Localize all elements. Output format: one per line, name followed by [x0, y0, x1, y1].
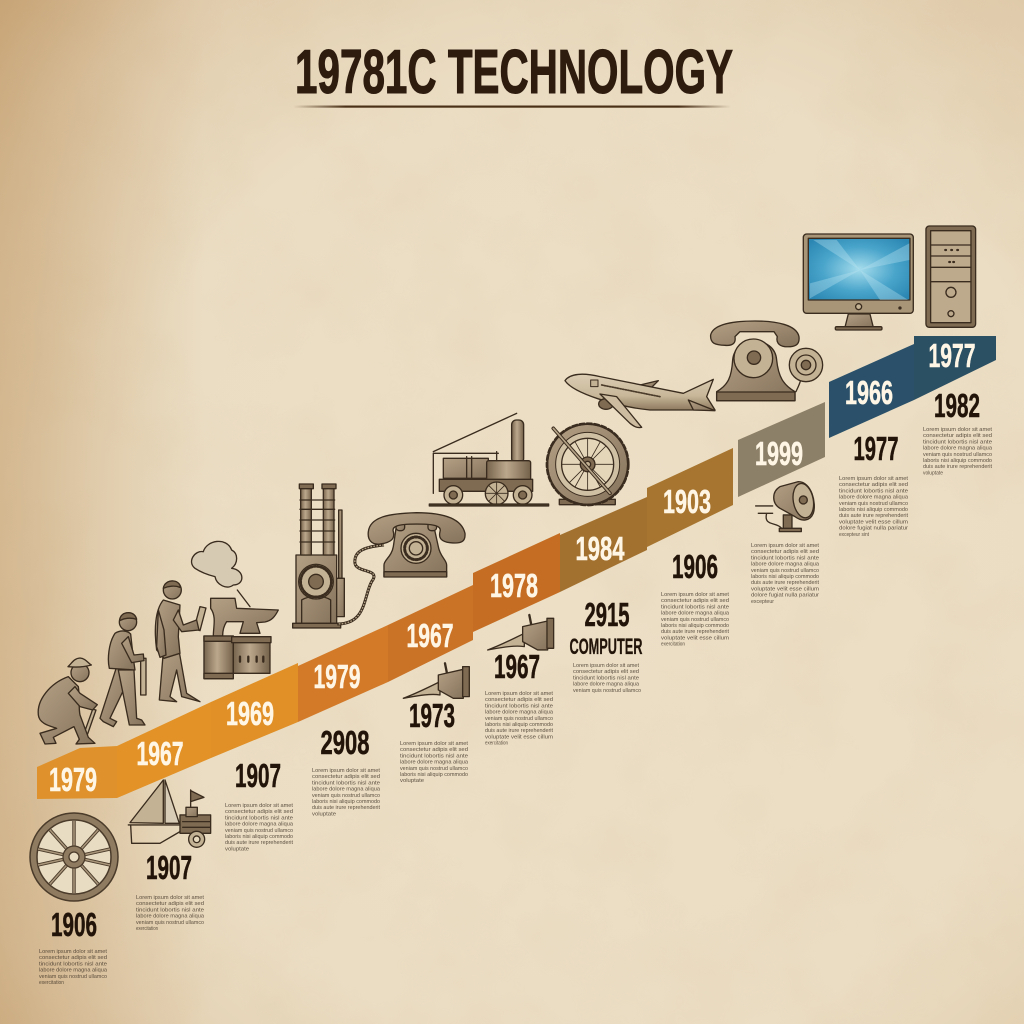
- icon: chimney furnace: [293, 484, 344, 628]
- segment 1977: [914, 336, 996, 400]
- icon: antique telephone: [711, 321, 823, 401]
- segment 1966: [829, 344, 914, 438]
- text block under 1977: voluptate velit esse cillum: [839, 519, 909, 525]
- text block under 2908: Lorem ipsum dolor sit amet: [312, 768, 381, 774]
- year 1973: 1973: [409, 697, 455, 734]
- text block under right 1906: duis aute irure reprehenderit: [661, 629, 730, 635]
- segment 1999: 1999: [755, 435, 803, 472]
- text block under 2908: labore dolore magna aliqua: [312, 787, 380, 793]
- text block under 1907: veniam quis nostrud ullamco: [136, 920, 204, 926]
- icon: spoked wheel: [30, 813, 118, 901]
- text block under 1982: voluptate: [923, 470, 943, 476]
- text block under 2908: consectetur adipis elit sed: [312, 774, 380, 780]
- text block under 1982: tincidunt lobortis nisl ante: [923, 439, 992, 445]
- text block under 1967: laboris nisi aliquip commodo: [485, 722, 553, 728]
- title: 19781C TECHNOLOGY: [295, 38, 733, 107]
- segment 1979: [37, 746, 117, 799]
- icon: sailboat vehicle: [128, 780, 211, 847]
- text block under 1982: [923, 427, 993, 476]
- text block under second 1907: veniam quis nostrud ullamco: [225, 828, 293, 834]
- text block under 1973: labore dolore magna aliqua: [400, 760, 468, 766]
- timeline ribbon: [37, 336, 996, 799]
- icon: crouching worker: [38, 658, 97, 744]
- computer label: COMPUTER: [570, 634, 643, 659]
- segment 1978: [473, 533, 560, 632]
- text block under 1977: veniam quis nostrud ullamco: [839, 501, 908, 507]
- text block under loudspeaker: labore dolore magna aliqua: [751, 562, 819, 568]
- text block under 1906: labore dolore magna aliqua: [39, 968, 107, 974]
- text block under loudspeaker: laboris nisi aliquip commodo: [751, 574, 819, 580]
- text block under loudspeaker: veniam quis nostrud ullamco: [751, 568, 819, 574]
- segment 1969: 1969: [226, 695, 274, 732]
- text block under right 1906: laboris nisi aliquip commodo: [661, 623, 729, 629]
- icon: plow left: [403, 663, 469, 698]
- text block under 1982: labore dolore magna aliqua: [923, 446, 992, 452]
- text block under 1973: veniam quis nostrud ullamco: [400, 766, 468, 772]
- segment 1967: 1967: [136, 735, 184, 772]
- text block under second 1907: consectetur adipis elit sed: [225, 809, 293, 815]
- segment 1967 second: [388, 585, 473, 682]
- icon: rotary telephone: [368, 513, 465, 577]
- text block under loudspeaker: tincidunt lobortis nisl ante: [751, 555, 819, 561]
- text block under 1967: Lorem ipsum dolor sit amet: [485, 691, 554, 697]
- text block under 1967: veniam quis nostrud ullamco: [485, 716, 553, 722]
- year 1907: 1907: [146, 849, 192, 886]
- icon: coiled telephone cord: [337, 545, 384, 624]
- icon group: furnace, telephone, locomotive, tire, plows: [293, 413, 628, 698]
- text block under second 1907: Lorem ipsum dolor sit amet: [225, 803, 294, 809]
- text block under 1982: Lorem ipsum dolor sit amet: [923, 427, 993, 433]
- text block under right 1906: Lorem ipsum dolor sit amet: [661, 592, 730, 598]
- segment 1967 second: 1967: [406, 617, 454, 654]
- text block under computer: [573, 663, 641, 694]
- text block under 1982: duis aute irure reprehenderit: [923, 464, 993, 470]
- segment 1967: [117, 702, 211, 798]
- text block under loudspeaker: excepteur: [751, 599, 774, 605]
- text block under 1973: laboris nisi aliquip commodo: [400, 772, 468, 778]
- segment 1978: 1978: [490, 567, 538, 604]
- year 1967: 1967: [494, 648, 540, 685]
- icon: computer tower: [926, 226, 976, 327]
- text block under second 1907: voluptate: [225, 846, 249, 852]
- text block under computer: veniam quis nostrud ullamco: [573, 688, 641, 694]
- text block under 1977: duis aute irure reprehenderit: [839, 513, 909, 519]
- text block under 1982: consectetur adipis elit sed: [923, 433, 992, 439]
- text block under 1907: consectetur adipis elit sed: [136, 901, 204, 907]
- text block under 1907: Lorem ipsum dolor sit amet: [136, 895, 205, 901]
- text block under computer: labore dolore magna aliqua: [573, 682, 639, 688]
- year 1906 left: 1906: [51, 906, 97, 943]
- text block under second 1907: duis aute irure reprehenderit: [225, 840, 294, 846]
- text block under 1967: voluptate velit esse cillum: [485, 734, 554, 740]
- text block under 1906: [39, 949, 108, 986]
- text block under 2908: tincidunt lobortis nisl ante: [312, 780, 380, 786]
- text block under 1906: tincidunt lobortis nisl ante: [39, 961, 107, 967]
- text block under 2908: [312, 768, 381, 817]
- icon: walking worker: [100, 613, 146, 727]
- text block under right 1906: exercitation: [661, 642, 685, 648]
- segment 1903: 1903: [663, 483, 711, 520]
- text block under 1907: labore dolore magna aliqua: [136, 914, 204, 920]
- segment 1979 second: 1979: [314, 658, 360, 695]
- text block under 1982: veniam quis nostrud ullamco: [923, 452, 992, 458]
- icons: workers, smoke and anvil: [38, 541, 278, 744]
- text block under 1907: tincidunt lobortis nisl ante: [136, 907, 204, 913]
- icon: large tire wheel: [547, 424, 628, 505]
- text block under 1977: consectetur adipis elit sed: [839, 482, 908, 488]
- icon: anvil on cylinders: [204, 598, 278, 679]
- segment 1966: 1966: [845, 374, 893, 411]
- icon: loudspeaker: [756, 482, 816, 532]
- icon: plow right: [488, 615, 554, 650]
- text block under computer: Lorem ipsum dolor sit amet: [573, 663, 640, 669]
- icon: locomotive: [429, 413, 549, 506]
- text block under 1977: Lorem ipsum dolor sit amet: [839, 476, 909, 482]
- text block under 1977: laboris nisi aliquip commodo: [839, 507, 908, 513]
- text block under 1967: [485, 691, 554, 747]
- year 2908: 2908: [320, 724, 370, 761]
- text block under loudspeaker: dolore fugiat nulla pariatur: [751, 593, 819, 599]
- text block under 1977: tincidunt lobortis nisl ante: [839, 488, 908, 494]
- text block under second 1907: labore dolore magna aliqua: [225, 822, 293, 828]
- black year labels: [51, 387, 980, 943]
- text block under 1906: exercitation: [39, 980, 64, 986]
- text block under 1977: labore dolore magna aliqua: [839, 495, 908, 501]
- segment 1969: [211, 663, 298, 758]
- text block under 1973: Lorem ipsum dolor sit amet: [400, 741, 469, 747]
- text block under second 1907: laboris nisi aliquip commodo: [225, 834, 293, 840]
- segment 1999: [738, 402, 825, 497]
- icons: plane, phone, loudspeaker, computer: [565, 226, 976, 532]
- text block under 1977: [839, 476, 909, 538]
- text block under 1977: excepteur sint: [839, 532, 869, 538]
- text block under loudspeaker: consectetur adipis elit sed: [751, 549, 819, 555]
- text block under 1982: laboris nisi aliquip commodo: [923, 458, 992, 464]
- text block under right 1906: voluptate velit esse cillum: [661, 635, 730, 641]
- icon: computer monitor: [803, 234, 913, 330]
- segment 1977: 1977: [928, 337, 976, 374]
- text block under loudspeaker: Lorem ipsum dolor sit amet: [751, 543, 820, 549]
- year 1907 second: 1907: [235, 757, 281, 794]
- text block under 1906: Lorem ipsum dolor sit amet: [39, 949, 108, 955]
- text block under right 1906: consectetur adipis elit sed: [661, 598, 729, 604]
- text block under 1977: dolore fugiat nulla pariatur: [839, 526, 908, 532]
- text block under 2908: laboris nisi aliquip commodo: [312, 799, 380, 805]
- text block under 1967: labore dolore magna aliqua: [485, 710, 553, 716]
- segment 1984: [560, 497, 647, 592]
- icon: smoke cloud: [192, 541, 250, 607]
- text block under 1967: consectetur adipis elit sed: [485, 697, 553, 703]
- icon: standing worker: [155, 581, 206, 702]
- icon: airplane: [565, 374, 715, 428]
- text block under computer: tincidunt lobortis nisl ante: [573, 675, 639, 681]
- text block under 1907: [136, 895, 205, 932]
- text block under 1973: voluptate: [400, 778, 424, 784]
- text block under second 1907: [225, 803, 294, 852]
- text block under computer: consectetur adipis elit sed: [573, 669, 639, 675]
- year 1982: 1982: [934, 387, 980, 424]
- text block under right 1906: tincidunt lobortis nisl ante: [661, 604, 729, 610]
- text block under right 1906: [661, 592, 730, 648]
- text block under 1973: tincidunt lobortis nisl ante: [400, 753, 468, 759]
- text block under 1967: exercitation: [485, 741, 508, 747]
- segment 1984: 1984: [576, 530, 625, 567]
- text block under second 1907: tincidunt lobortis nisl ante: [225, 815, 293, 821]
- text block under 1967: duis aute irure reprehenderit: [485, 728, 554, 734]
- text block under 1906: veniam quis nostrud ullamco: [39, 974, 107, 980]
- text block under 2908: veniam quis nostrud ullamco: [312, 793, 380, 799]
- year 1906 right: 1906: [672, 548, 718, 585]
- text block under loudspeaker: duis aute irure reprehenderit: [751, 580, 820, 586]
- year 2915: 2915: [584, 596, 630, 633]
- text block under 1906: consectetur adipis elit sed: [39, 955, 107, 961]
- text block under 2908: duis aute irure reprehenderit: [312, 805, 381, 811]
- text block under 1907: exercitation: [136, 926, 158, 932]
- segment 1979: 1979: [49, 761, 97, 798]
- text block under loudspeaker: [751, 543, 820, 605]
- text block under 1973: [400, 741, 469, 784]
- segment 1903: [647, 448, 733, 547]
- text block under right 1906: veniam quis nostrud ullamco: [661, 617, 729, 623]
- text block under 2908: voluptate: [312, 811, 336, 817]
- text block under 1967: tincidunt lobortis nisl ante: [485, 703, 553, 709]
- text block under right 1906: labore dolore magna aliqua: [661, 611, 729, 617]
- year 1977: 1977: [854, 430, 898, 467]
- text block under loudspeaker: voluptate velit esse cillum: [751, 586, 820, 592]
- text block under 1973: consectetur adipis elit sed: [400, 747, 468, 753]
- segment 1979 second: [298, 625, 388, 722]
